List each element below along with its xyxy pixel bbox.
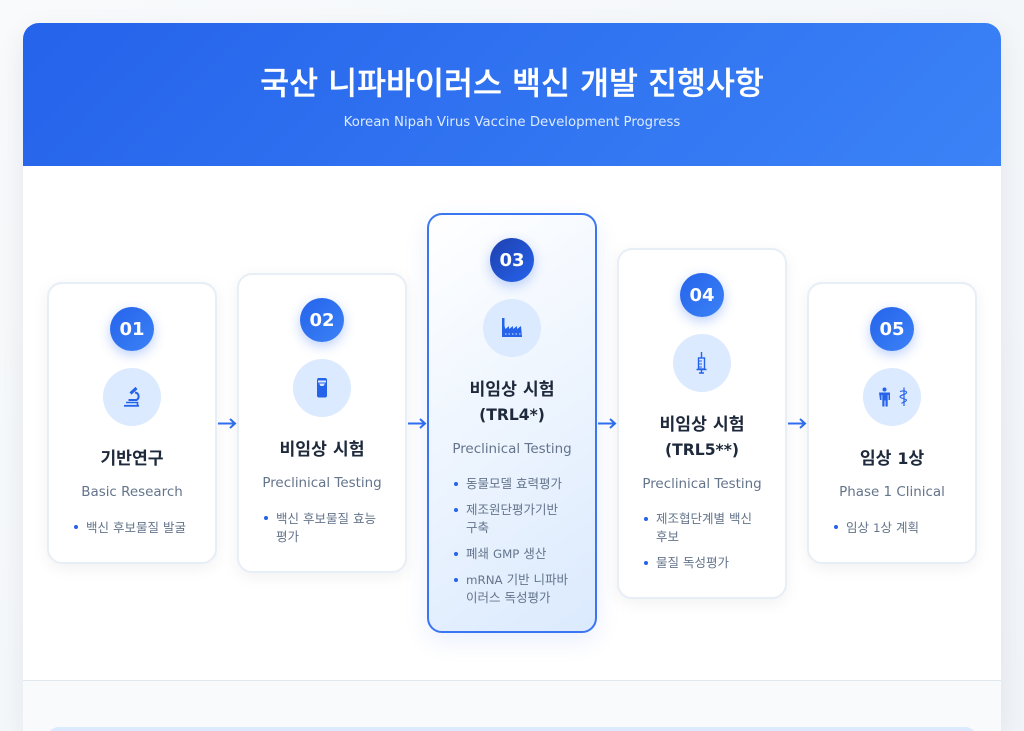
step heading: 비임상 시험 — [659, 415, 745, 435]
panel: step 05 phase 1 clinical — [807, 282, 977, 564]
step heading: (TRL5**) — [665, 441, 739, 459]
step details: 백신 후보물질 효능 평가 — [276, 511, 376, 544]
arrow: 04 to 05 — [788, 418, 806, 429]
step number 03: 03 — [499, 250, 525, 271]
step details: 임상 1상 계획 — [846, 520, 919, 535]
panel: step 01 basic research — [47, 282, 217, 564]
step subtitle: Preclinical Testing — [452, 442, 572, 457]
arrow: 03 to 04 — [598, 418, 616, 429]
step details: 제조원단평가기반 구축 — [466, 502, 558, 535]
step details: 폐쇄 GMP 생산 — [466, 546, 546, 561]
step details: 백신 후보물질 발굴 — [86, 520, 186, 535]
step heading — [469, 380, 555, 424]
icon: person and medical staff — [863, 368, 921, 426]
title: 국산 니파바이러스 백신 개발 진행사항 — [260, 66, 764, 102]
step details — [454, 476, 568, 605]
icon: syringe — [673, 334, 731, 392]
icon: microscope — [103, 368, 161, 426]
step heading: (TRL4*) — [479, 406, 545, 424]
step details — [644, 511, 752, 570]
header banner — [23, 23, 1001, 166]
step heading: 기반연구 — [100, 449, 164, 469]
subtitle: Korean Nipah Virus Vaccine Development Progress — [344, 114, 680, 130]
footer section — [23, 680, 1001, 731]
step heading: 비임상 시험 — [469, 380, 555, 400]
step number 05 — [870, 307, 914, 351]
arrow: 02 to 03 — [408, 418, 426, 429]
step heading: 임상 1상 — [860, 449, 924, 469]
step number 03 — [490, 238, 534, 282]
step number 01 — [110, 307, 154, 351]
panel: step 03 preclinical TRL4 — [427, 213, 597, 633]
step number 05: 05 — [879, 319, 905, 340]
step details: mRNA 기반 니파바이러스 독성평가 — [466, 572, 568, 605]
step number 02: 02 — [309, 310, 335, 331]
step heading: 비임상 시험 — [279, 440, 365, 460]
arrow: 01 to 02 — [218, 418, 236, 429]
step subtitle: Phase 1 Clinical — [839, 485, 945, 500]
step number 04: 04 — [689, 285, 715, 306]
step details: 제조협단계별 백신 후보 — [656, 511, 752, 544]
step details: 동물모델 효력평가 — [466, 476, 562, 491]
step subtitle: Basic Research — [81, 485, 183, 500]
note box — [50, 727, 974, 731]
panel: step 02 preclinical — [237, 273, 407, 573]
step number 02 — [300, 298, 344, 342]
step number 01: 01 — [119, 319, 145, 340]
icon: factory — [483, 299, 541, 357]
step number 04 — [680, 273, 724, 317]
step subtitle: Preclinical Testing — [642, 477, 762, 492]
step heading — [659, 415, 745, 459]
icon: test tube — [293, 359, 351, 417]
step details: 물질 독성평가 — [656, 555, 729, 570]
step subtitle: Preclinical Testing — [262, 476, 382, 491]
panel: step 04 preclinical TRL5 — [617, 248, 787, 599]
